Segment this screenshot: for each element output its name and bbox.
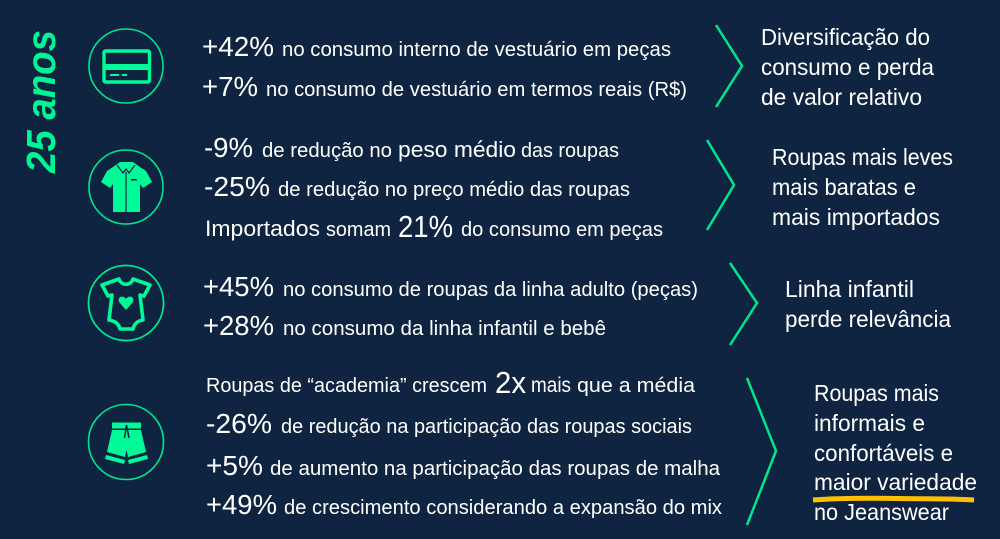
text: gym clothes 2x: Roupas de “academia” crescem — [206, 375, 487, 397]
text: -9% weight: das roupas — [521, 140, 619, 162]
text: -9% weight: -9% — [204, 132, 253, 163]
heading: 25 anos: 25 anos — [18, 30, 64, 174]
icon: shirt — [89, 150, 163, 224]
text: +5% knit: de aumento na participação das roupas de malha — [270, 458, 721, 480]
arrow: chevron 1 — [716, 25, 742, 107]
text: imports 21% — [205, 209, 663, 244]
text: +5% knit — [206, 450, 721, 481]
panel: informal clothes — [206, 365, 722, 520]
conclusion: informal and comfortable — [814, 380, 977, 525]
text: imports 21%: Importados — [205, 216, 320, 241]
text: +42% consumption in pieces: no consumo interno de vestuário em peças — [282, 39, 671, 61]
arrow: chevron 4 — [747, 378, 776, 525]
text: imports 21%: 21% — [398, 209, 453, 244]
text: -9% weight — [204, 132, 619, 163]
text: +49% mix — [206, 489, 722, 520]
icon: credit card — [89, 29, 163, 103]
text: -26% formal: -26% — [206, 408, 272, 439]
conclusion: infant line — [785, 276, 951, 332]
text: gym clothes 2x: 2x — [495, 365, 526, 400]
text: +49% mix: de crescimento considerando a expansão do mix — [284, 497, 722, 519]
conclusion: informal and comfortable: confortáveis e — [814, 440, 953, 466]
text: +7% consumption in real terms: +7% — [202, 71, 258, 102]
conclusion: diversification: de valor relativo — [761, 84, 922, 110]
text: imports 21%: somam — [326, 219, 391, 241]
text: gym clothes 2x: mais — [531, 374, 571, 397]
text: -9% weight: de redução no — [262, 140, 392, 162]
panel: adult and infant lines — [203, 271, 698, 341]
conclusion: informal and comfortable: Roupas mais — [814, 380, 939, 406]
panel: lighter cheaper imported — [204, 132, 663, 244]
highlight underline — [813, 498, 974, 500]
text: +45% adult: no consumo de roupas da linha adulto (peças) — [283, 279, 698, 301]
text: +5% knit: +5% — [206, 450, 263, 481]
conclusion: diversification: consumo e perda — [761, 54, 934, 80]
conclusion: lighter clothes: mais baratas e — [772, 174, 916, 200]
text: -25% price — [204, 171, 630, 202]
text: +28% infant — [203, 310, 606, 341]
text: -26% formal — [206, 408, 692, 439]
text: imports 21%: do consumo em peças — [461, 219, 663, 241]
conclusion: lighter clothes: Roupas mais leves — [772, 144, 953, 170]
text: +42% consumption in pieces — [202, 31, 671, 62]
arrow: chevron 2 — [707, 140, 734, 230]
conclusion: diversification — [761, 24, 934, 110]
conclusion: lighter clothes — [772, 144, 953, 230]
text: -25% price: de redução no preço médio das roupas — [278, 179, 630, 201]
text: gym clothes 2x — [206, 365, 696, 400]
text: -26% formal: de redução na participação das roupas sociais — [281, 416, 692, 438]
panel: consumption — [202, 31, 687, 102]
conclusion: infant line: perde relevância — [785, 306, 951, 332]
text: +49% mix: +49% — [206, 489, 277, 520]
arrow: chevron 3 — [730, 263, 757, 345]
text: +42% consumption in pieces: +42% — [202, 31, 274, 62]
text: -9% weight: peso médio — [398, 137, 516, 162]
text: +28% infant: +28% — [203, 310, 274, 341]
conclusion: informal and comfortable: informais e — [814, 410, 925, 436]
text: +45% adult — [203, 271, 698, 302]
conclusion: lighter clothes: mais importados — [772, 204, 940, 230]
text: +45% adult: +45% — [203, 271, 274, 302]
icon: baby bodysuit — [88, 266, 164, 340]
conclusion: informal and comfortable: maior variedade — [814, 469, 977, 495]
conclusion: informal and comfortable: no Jeanswear — [814, 499, 949, 525]
text: +7% consumption in real terms — [202, 71, 687, 102]
conclusion: diversification: Diversificação do — [761, 24, 930, 50]
text: +28% infant: no consumo da linha infantil e bebê — [283, 318, 606, 340]
text: gym clothes 2x: que a média — [577, 375, 696, 397]
conclusion: infant line: Linha infantil — [785, 276, 914, 302]
text: -25% price: -25% — [204, 171, 270, 202]
icon: shorts — [88, 404, 164, 480]
text: +7% consumption in real terms: no consumo de vestuário em termos reais (R$) — [266, 79, 687, 101]
